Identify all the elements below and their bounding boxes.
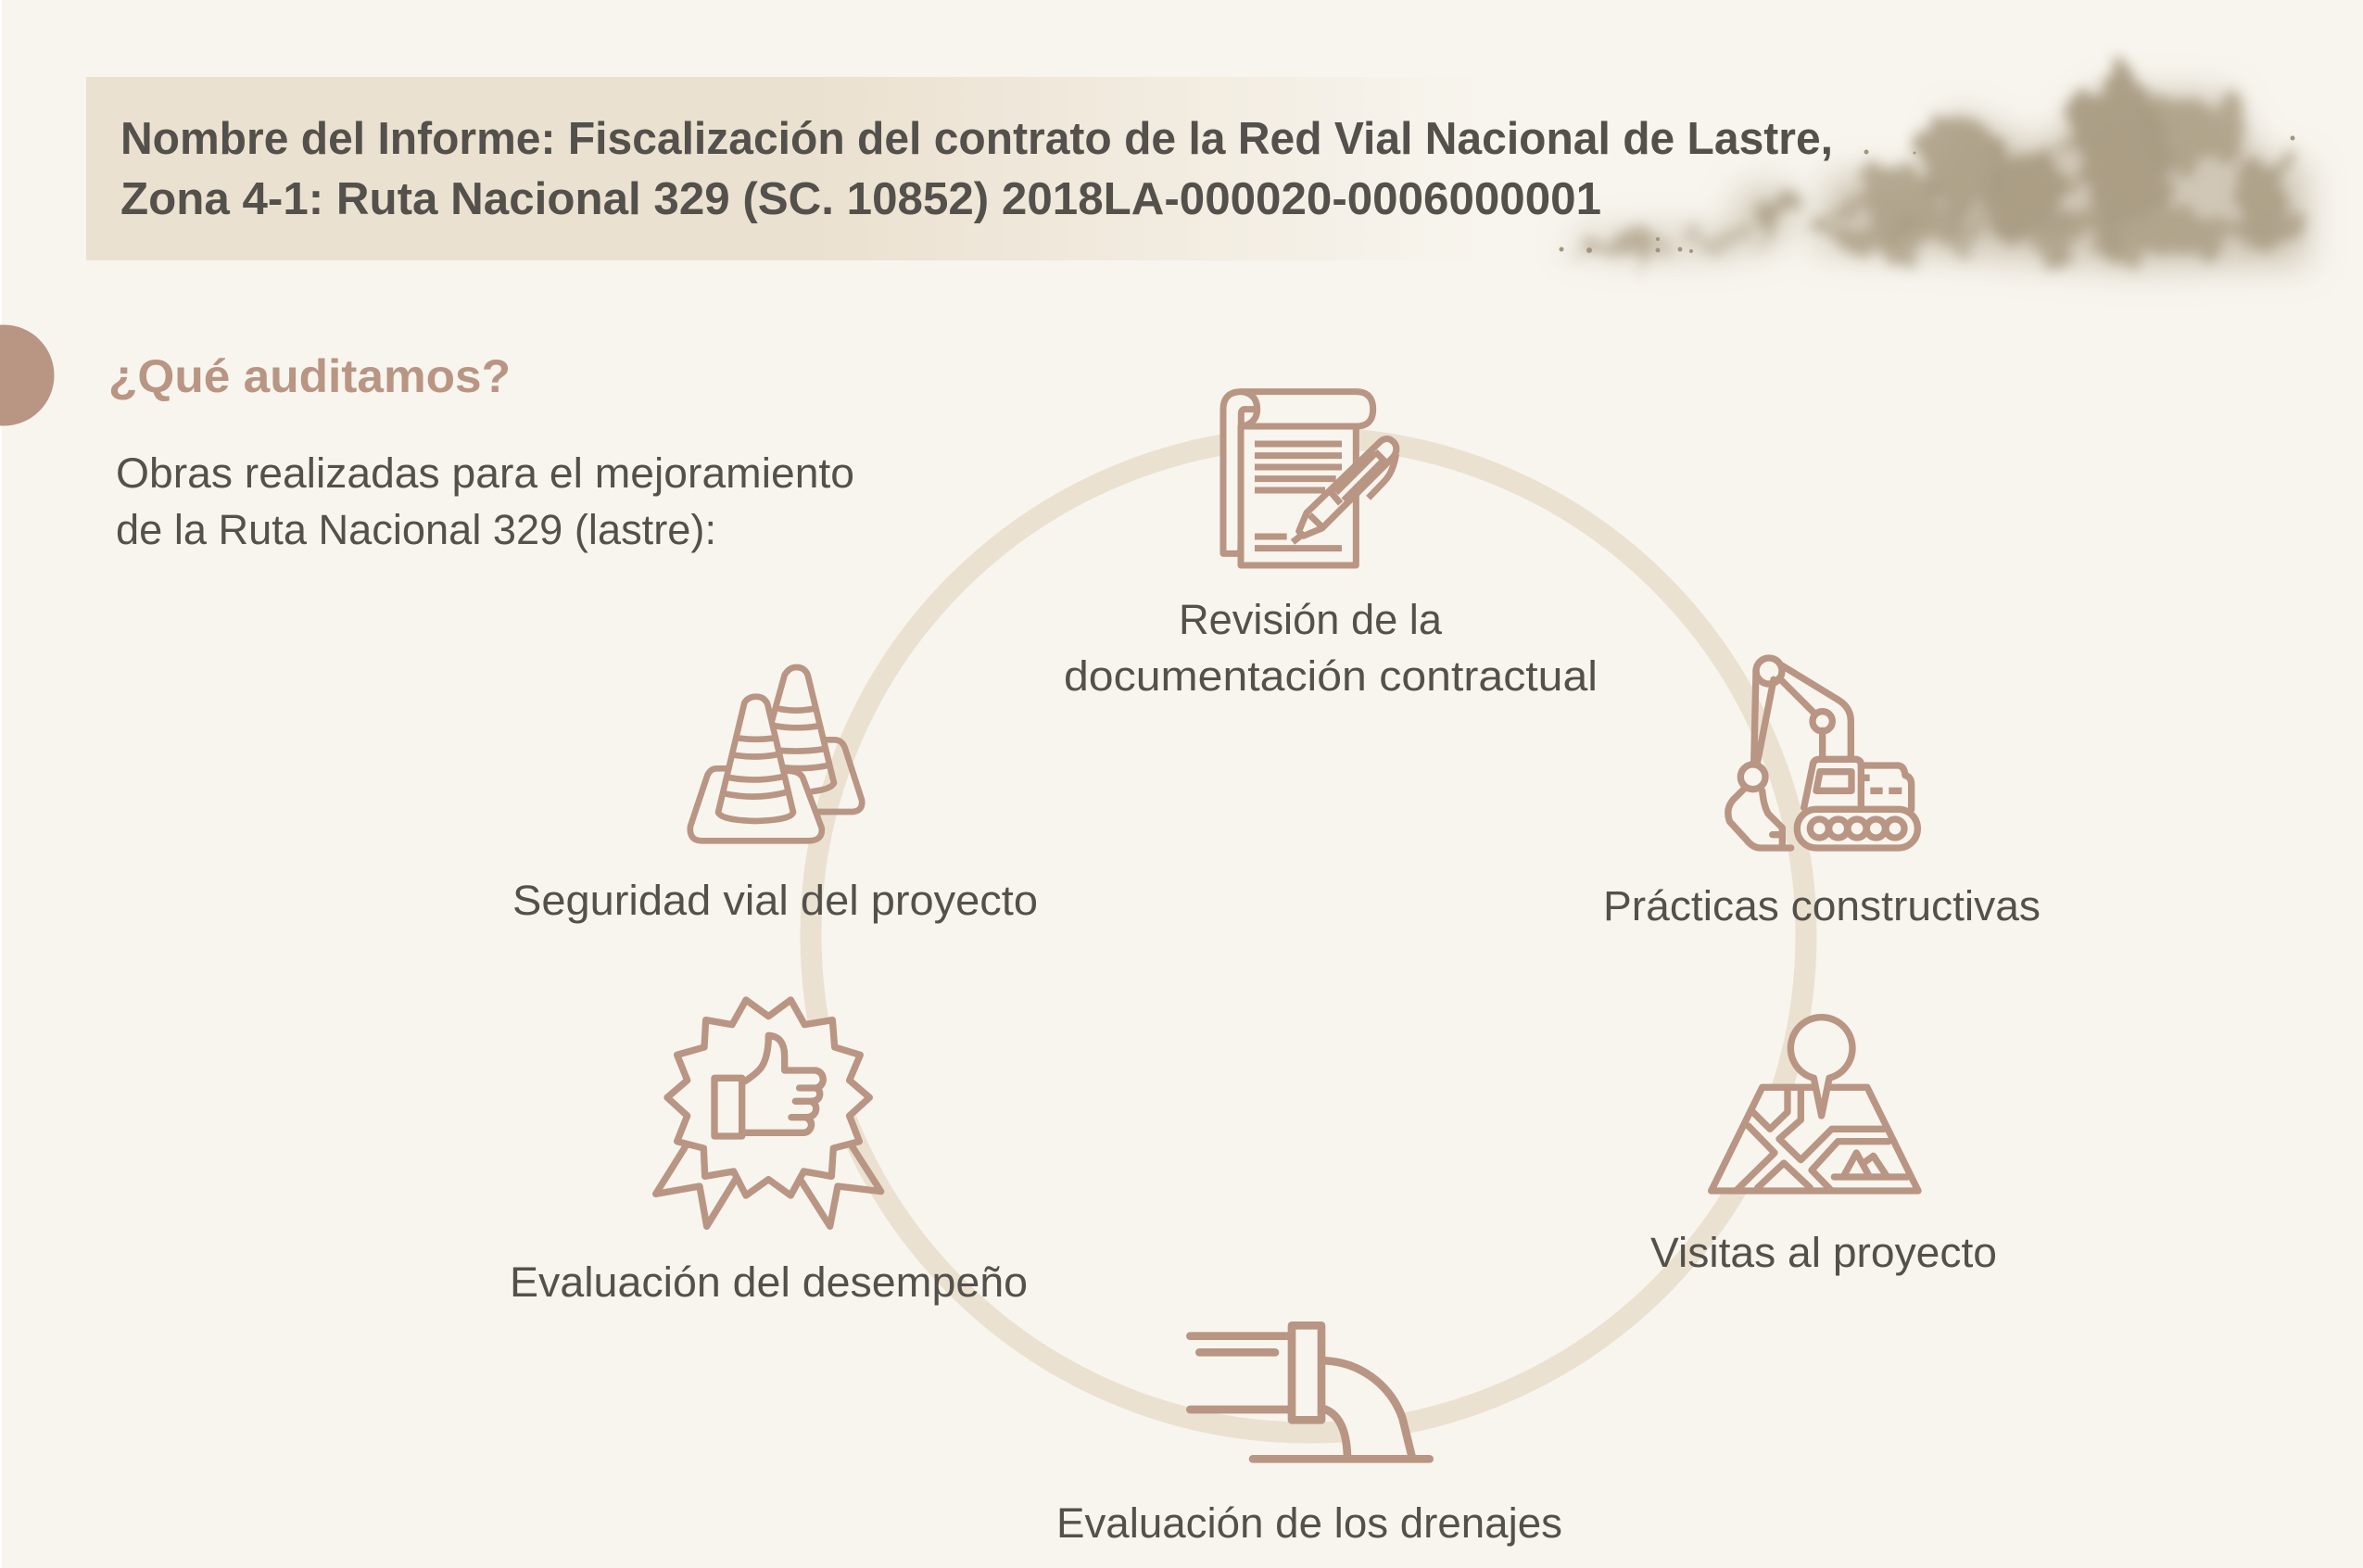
intro text: de la Ruta Nacional 329 (lastre): [116,506,716,553]
icon: traffic cones [690,667,862,841]
label: project visits: Visitas al proyecto [1650,1229,1997,1276]
section marker [0,324,54,426]
title: Zona 4-1: Ruta Nacional 329 (SC. 10852) 2018LA-000020-0006000001 [120,173,1601,224]
intro text [116,449,854,553]
cycle ring [811,437,1806,1433]
intro text: Obras realizadas para el mejoramiento [116,449,854,497]
dust cloud [1559,79,2307,269]
header banner [86,77,1485,260]
label: construction practices: Prácticas constructivas [1603,882,2041,929]
title [120,113,1833,224]
label: document review: Revisión de la [1179,596,1443,643]
label: document review: documentación contractual [1064,652,1598,700]
icon: performance badge [656,1000,881,1226]
icon: drainage pipe [1190,1325,1430,1459]
label: drainage evaluation: Evaluación de los drenajes [1056,1499,1562,1547]
icon: map with pin [1712,1018,1918,1191]
icon: excavator [1728,658,1917,848]
icon: contract document [1223,392,1396,565]
label: road safety: Seguridad vial del proyecto [512,877,1038,924]
section heading: ¿Qué auditamos? [108,350,511,402]
label: document review [1064,596,1598,700]
label: performance evaluation: Evaluación del desempeño [510,1258,1028,1306]
title: Nombre del Informe: Fiscalización del contrato de la Red Vial Nacional de Lastre, [120,113,1833,164]
